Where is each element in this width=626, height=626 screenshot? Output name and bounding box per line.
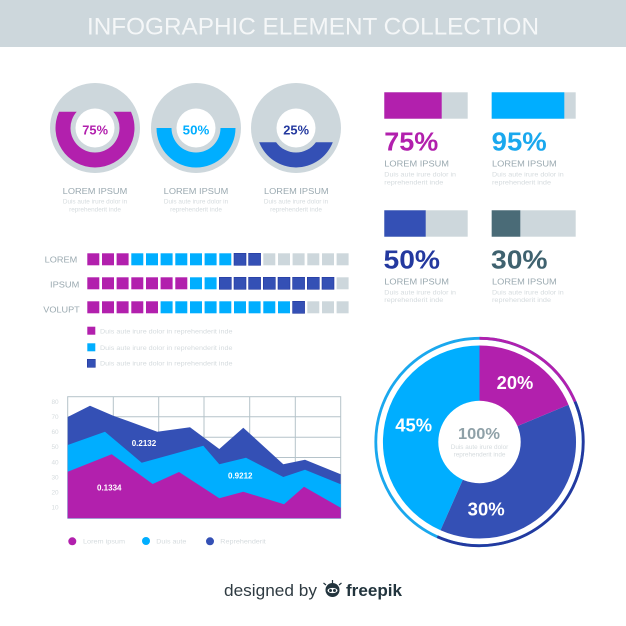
area: dark series	[68, 406, 341, 518]
stat 95%: reprehenderit inde	[492, 179, 552, 186]
y axis labels: 80	[51, 399, 59, 406]
value labels: 0.9212	[228, 470, 253, 480]
slice: 30%	[440, 405, 576, 539]
donut gauge 25%: Duis aute irure dolor in	[264, 198, 329, 205]
stat 75%: 75%	[384, 127, 438, 157]
donut gauge 75%: reprehenderit inde	[69, 206, 121, 213]
panel: stat bars	[384, 92, 576, 304]
value labels: 0.1334	[97, 482, 122, 492]
legend: area chart: Lorem ipsum	[83, 538, 125, 545]
slice labels: 30%	[468, 500, 505, 520]
stat 30%	[491, 210, 576, 304]
y axis labels: 50	[51, 444, 59, 451]
legend: area chart	[68, 537, 266, 546]
stat 50%	[384, 210, 468, 304]
footer: designed by freepik: designed by	[224, 582, 318, 600]
header band with title	[0, 0, 626, 47]
center label: Duis aute irure dolor	[451, 444, 509, 451]
row: IPSUM: IPSUM	[50, 279, 79, 289]
y axis labels: 60	[51, 429, 59, 436]
legend: area chart: Reprehenderit	[220, 538, 266, 546]
panel: area chart	[51, 397, 341, 518]
stat 75%: reprehenderit inde	[384, 179, 444, 186]
stat 95%: 95%	[492, 127, 547, 157]
center label: reprehenderit inde	[454, 451, 506, 458]
center label	[438, 401, 521, 483]
slice: 45%	[383, 345, 480, 530]
y axis labels: 20	[51, 489, 59, 496]
row: IPSUM	[50, 277, 349, 289]
center label: 100%	[458, 426, 500, 443]
legend: square progress rows: Duis aute irure dolor in reprehenderit inde	[100, 345, 233, 352]
outer ring	[376, 338, 583, 546]
row: VOLUPT	[43, 301, 349, 314]
value labels	[97, 438, 253, 492]
stat 95%: Duis aute irure dolor in	[492, 172, 564, 178]
legend: area chart: Duis aute	[156, 538, 187, 546]
stat 50%: reprehenderit inde	[384, 297, 444, 304]
area: blue series	[68, 432, 341, 518]
y axis labels: 30	[51, 474, 59, 481]
icon: freepik logo	[324, 580, 342, 597]
donut gauge 50%: reprehenderit inde	[170, 206, 222, 213]
panel: square progress rows	[43, 253, 349, 314]
donut gauge 25%: reprehenderit inde	[270, 206, 322, 213]
stat 30%: reprehenderit inde	[492, 297, 552, 304]
donut gauge 75%: Duis aute irure dolor in	[63, 198, 128, 205]
stat 75%: Duis aute irure dolor in	[384, 172, 456, 178]
stat 95%	[492, 92, 576, 186]
donut gauge 50%	[151, 83, 241, 213]
slice: 20%	[480, 346, 568, 442]
stat 30%: LOREM IPSUM	[492, 276, 557, 286]
y axis labels: 10	[51, 504, 59, 511]
y axis labels: 40	[51, 459, 59, 466]
y axis labels	[51, 399, 59, 511]
donut gauge 25%: LOREM IPSUM	[264, 186, 329, 196]
stat 50%: Duis aute irure dolor in	[384, 289, 456, 296]
donut gauge 50%: Duis aute irure dolor in	[164, 198, 229, 205]
legend: square progress rows	[87, 327, 233, 368]
donut gauge 50%: LOREM IPSUM	[164, 186, 228, 196]
donut gauge 75%: LOREM IPSUM	[63, 186, 127, 196]
stat 75%: LOREM IPSUM	[384, 159, 449, 169]
donut gauge 50%: 50%	[183, 123, 209, 137]
row: LOREM: LOREM	[45, 254, 77, 264]
row: VOLUPT: VOLUPT	[43, 304, 80, 314]
footer: designed by freepik: freepik	[346, 581, 403, 600]
stat 50%: LOREM IPSUM	[384, 276, 449, 286]
donut gauge 25%: 25%	[283, 123, 309, 137]
stat 75%	[384, 92, 468, 186]
panel: donut gauges	[50, 83, 341, 213]
donut gauge 75%: 75%	[82, 123, 108, 137]
stat 95%: LOREM IPSUM	[492, 159, 557, 169]
stat 50%: 50%	[384, 244, 440, 274]
row: LOREM	[45, 253, 349, 265]
donut gauge 25%	[251, 83, 341, 213]
slice labels: 45%	[395, 416, 432, 436]
stat 30%: 30%	[491, 244, 548, 274]
area: purple series	[68, 454, 341, 518]
legend: square progress rows: Duis aute irure dolor in reprehenderit inde	[100, 360, 233, 368]
y axis labels: 70	[51, 414, 59, 421]
panel: pie chart	[376, 338, 583, 546]
slice labels: 20%	[497, 373, 533, 393]
donut gauge 75%	[50, 83, 140, 213]
value labels: 0.2132	[132, 438, 157, 448]
legend: square progress rows: Duis aute irure dolor in reprehenderit inde	[100, 328, 233, 336]
slice labels	[395, 373, 533, 520]
footer: designed by freepik	[224, 580, 403, 600]
stat 30%: Duis aute irure dolor in	[492, 289, 564, 296]
header band with title: INFOGRAPHIC ELEMENT COLLECTION	[87, 14, 539, 40]
